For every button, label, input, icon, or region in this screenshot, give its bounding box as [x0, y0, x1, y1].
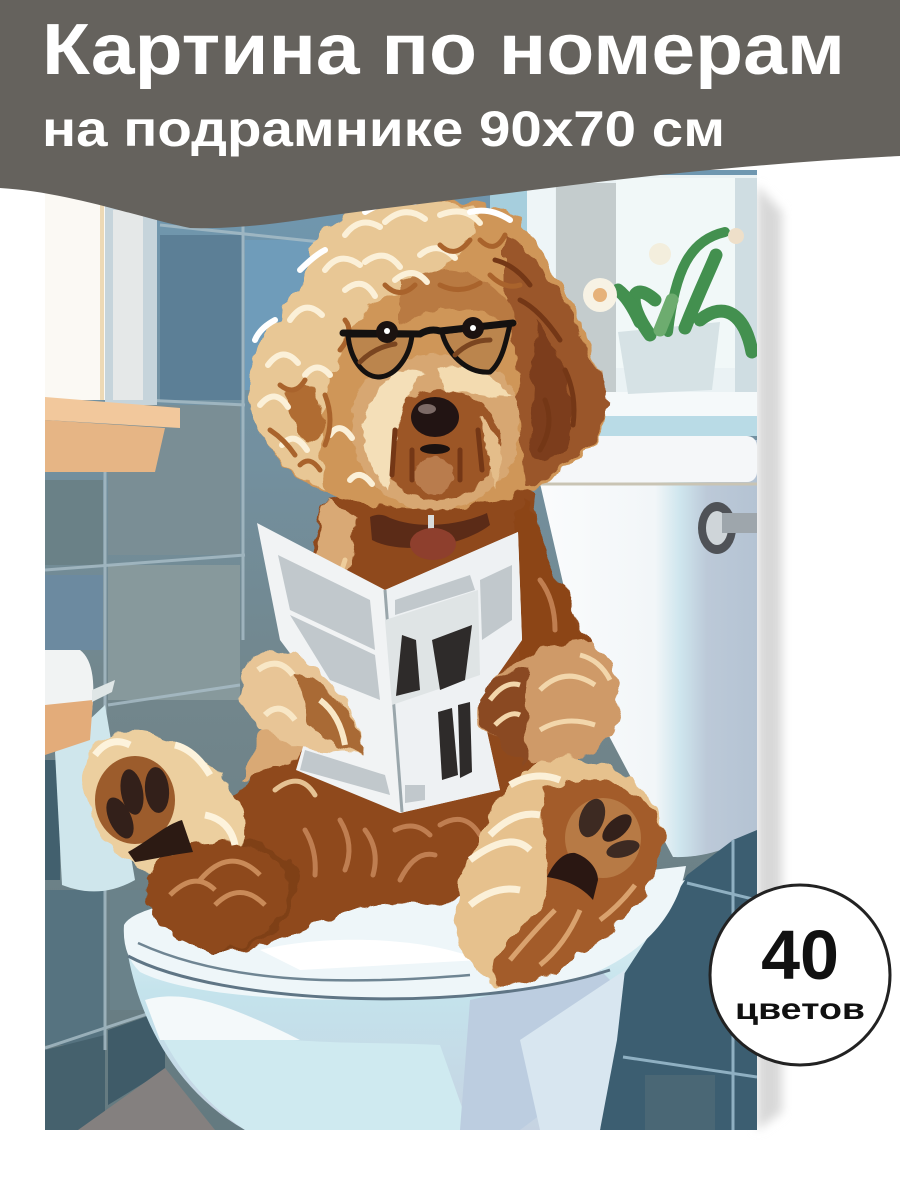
plant pot	[618, 322, 720, 394]
collar tag	[410, 515, 456, 560]
collar	[370, 513, 490, 548]
title: Картина по номерам	[42, 10, 845, 90]
dog	[82, 199, 663, 988]
newspaper	[257, 523, 522, 813]
right lower tiles	[600, 830, 757, 1130]
newspaper photo	[385, 590, 480, 705]
mouth	[420, 444, 450, 454]
window sill	[45, 397, 180, 472]
muzzle	[352, 354, 519, 510]
toilet paper roll	[45, 650, 135, 891]
flowers	[583, 228, 744, 312]
body curls	[272, 558, 558, 882]
toilet bowl	[124, 866, 686, 1130]
floor	[78, 1068, 215, 1130]
dog right paw on newspaper	[477, 640, 620, 765]
dog body	[148, 476, 600, 953]
painting	[45, 170, 757, 1130]
left foot pads	[95, 756, 175, 844]
dog left foot	[82, 733, 289, 952]
dog head fur	[249, 199, 607, 509]
dog left paw on newspaper	[240, 649, 363, 758]
left window	[45, 190, 157, 405]
badge: 40 colours: цветов	[735, 993, 865, 1026]
badge: 40 colours	[710, 885, 890, 1065]
flush handle	[698, 502, 757, 554]
canvas side shadow	[757, 185, 782, 1130]
curls midtone	[270, 235, 520, 470]
glasses	[343, 323, 513, 377]
badge: 40 colours: 40	[761, 916, 839, 994]
header banner	[0, 0, 900, 228]
nose	[411, 397, 459, 437]
tiled wall	[45, 170, 757, 1130]
curls dark	[392, 260, 574, 480]
toilet tank	[530, 436, 757, 857]
newspaper figures	[396, 625, 472, 780]
right window with plant	[490, 175, 757, 436]
plant leaves	[618, 232, 752, 352]
right foot pads	[565, 798, 641, 878]
dog right foot	[455, 759, 663, 988]
newspaper text blocks	[278, 555, 512, 803]
eyes	[376, 317, 484, 343]
subtitle: на подрамнике 90х70 см	[42, 101, 725, 157]
curls texture	[255, 201, 510, 484]
